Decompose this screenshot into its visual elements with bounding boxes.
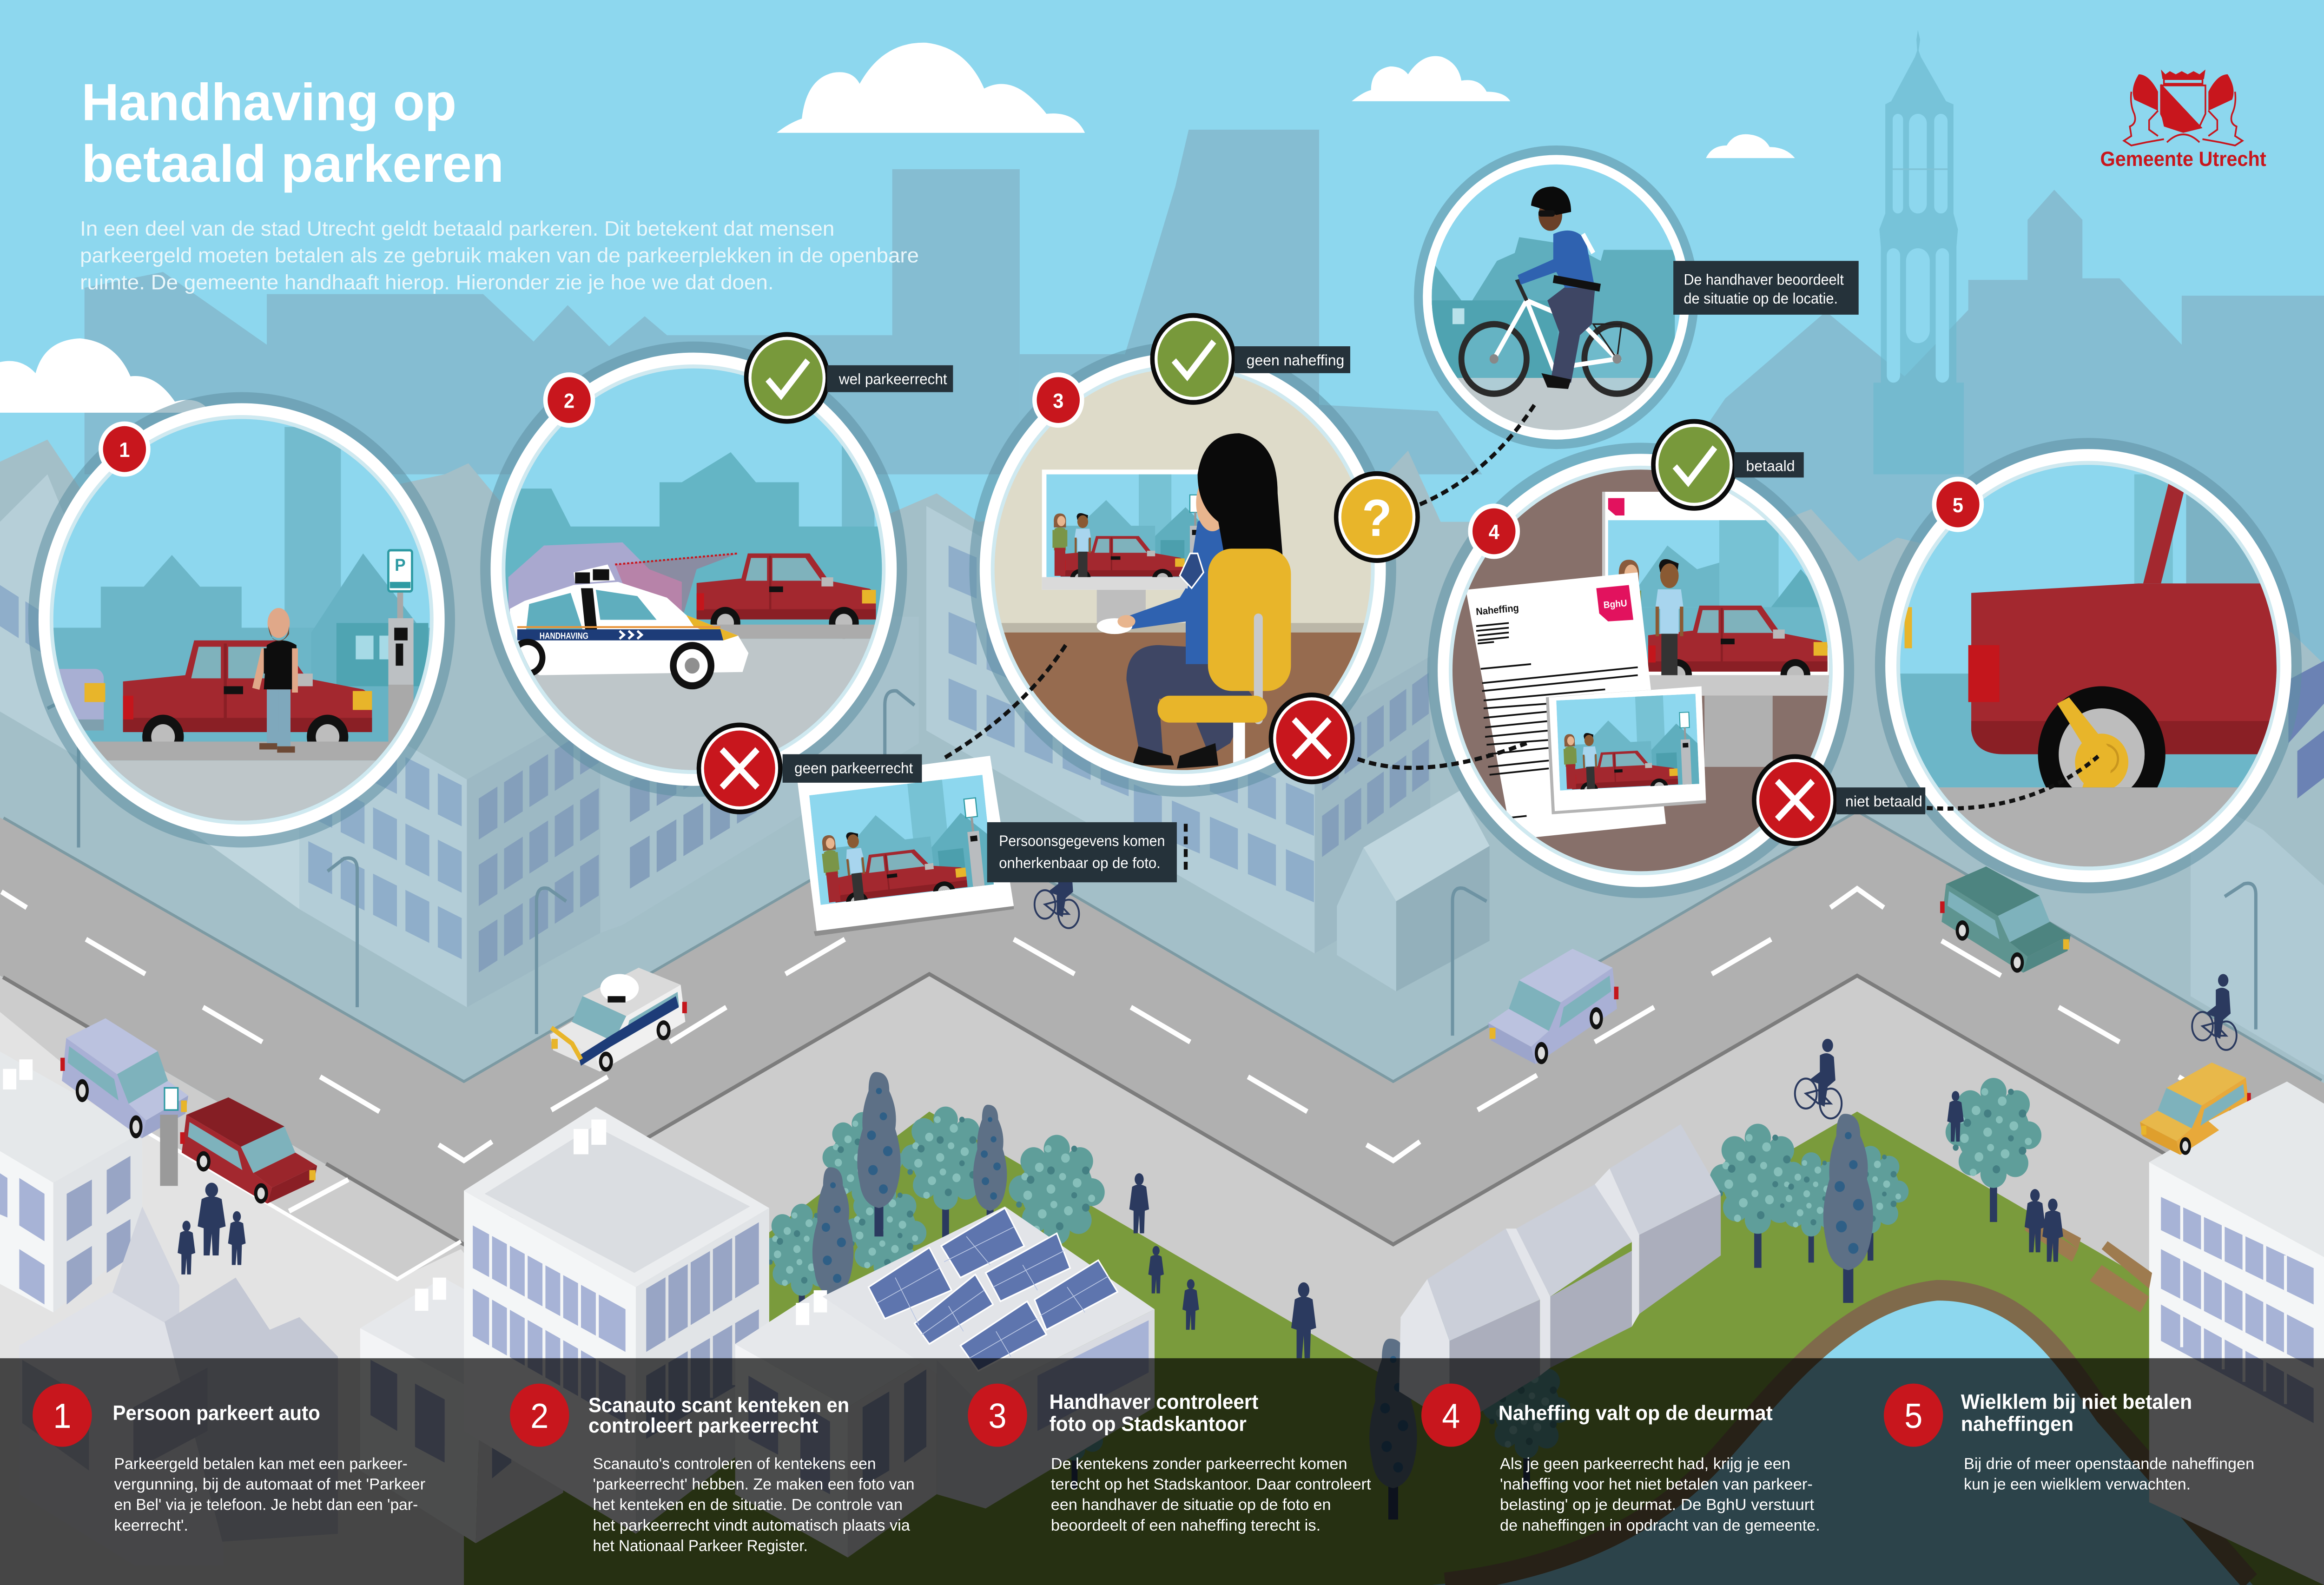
road dashes: [1, 889, 2235, 1211]
scene: back lavender car: [508, 542, 682, 620]
step 2 caption: [510, 1384, 914, 1555]
cross badge: geen parkeerrecht: [697, 723, 783, 814]
car: parked lavender: [60, 1018, 188, 1138]
car: lavender van: [1488, 949, 1618, 1064]
cross badge: niet betaald: [1752, 754, 1838, 846]
scene: ground: [489, 625, 904, 639]
dashed route: desk cross to letter: [1358, 743, 1526, 768]
step 3 body: terecht op het Stadskantoor. Daar controleert: [1051, 1476, 1371, 1493]
logo Gemeente Utrecht: [2100, 70, 2266, 171]
step 2 heading: [588, 1394, 849, 1437]
check badge: wel parkeerrecht: [744, 332, 830, 424]
step 3 body: beoordeelt of een naheffing terecht is.: [1051, 1517, 1320, 1534]
kerb line: [3, 813, 2321, 1083]
step 4 body: Als je geen parkeerrecht had, krijg je een: [1500, 1455, 1790, 1473]
scene: monitor: [1042, 469, 1214, 623]
step 4 body: de naheffingen in opdracht van de gemeente.: [1500, 1517, 1820, 1534]
car: parked red: [180, 1097, 317, 1203]
title text: betaald parkeren: [81, 135, 504, 193]
letter: [1466, 572, 1666, 839]
people and cyclists: [178, 852, 2237, 1358]
letter lines: [1476, 623, 1638, 818]
road surface: [0, 813, 2324, 1246]
upper city block: [0, 440, 2324, 1083]
trees: left park cluster: [762, 1072, 1105, 1324]
scene: parking sign and meter: [388, 550, 414, 748]
step 2 body: 'parkeerrecht' hebben. Ze maken een foto van: [593, 1476, 914, 1493]
building: bottom left corner: [0, 1051, 142, 1312]
letter title: Naheffing: [1476, 602, 1519, 617]
scene: tower: [842, 445, 875, 527]
scene: faint tower and skyline: [2134, 475, 2173, 664]
scene: clamped wheel: [2038, 686, 2166, 822]
green park: [464, 1111, 2324, 1585]
badge 5: 5: [1953, 494, 1963, 517]
scene: open tailgate: [2143, 484, 2185, 583]
canal water: [1432, 1290, 2253, 1585]
intro paragraph: [80, 218, 919, 294]
scene: enforcer: [1097, 433, 1287, 768]
scene: man: [252, 608, 298, 753]
dashed route: desk to photo: [943, 645, 1066, 759]
step 5 body: [1964, 1455, 2254, 1493]
car: scan car: [550, 968, 687, 1071]
step 3 heading: foto op Stadskantoor: [1050, 1413, 1247, 1436]
building: right bottom corner: [2149, 1082, 2324, 1585]
trees under the caption band: [1036, 1313, 2313, 1519]
step 5 number: 5: [1904, 1397, 1922, 1435]
car: yellow: [2140, 1063, 2251, 1155]
scene: skyline: [504, 452, 889, 633]
label: betaald: [1734, 452, 1804, 477]
scene: ground: [1423, 378, 1690, 449]
pavement lower left: [0, 1012, 712, 1585]
trees: right park cluster: [1710, 1078, 2041, 1303]
step 1 body: vergunning, bij de automaat of met 'Parkeer: [114, 1476, 425, 1493]
scene: skyline: [1432, 237, 1675, 379]
building: B: [464, 1107, 769, 1534]
parking sign and meter: [160, 1088, 178, 1186]
title text: Handhaving op: [81, 73, 456, 132]
step 5 heading: [1961, 1391, 2192, 1436]
badge 2: 2: [564, 390, 574, 413]
scene: church tower: [284, 427, 341, 648]
step 4 body: [1500, 1455, 1820, 1534]
check badge: betaald: [1651, 419, 1737, 511]
label: handhaver beoordeelt: de situatie op de locatie.: [1684, 290, 1838, 307]
dashed route: niet betaald to clamp: [1927, 756, 2099, 809]
step 3 heading: Handhaver controleert: [1050, 1391, 1258, 1413]
intro paragraph: In een deel van de stad Utrecht geldt betaald parkeren. Dit betekent dat mensen: [80, 218, 834, 240]
label: geen parkeerrecht: [783, 754, 922, 783]
step 2 heading: Scanauto scant kenteken en: [588, 1394, 849, 1417]
badge 2: [543, 372, 595, 428]
step 5 heading: naheffingen: [1961, 1413, 2073, 1436]
title text: [81, 73, 504, 193]
cloud: left: [0, 338, 211, 413]
house: centre gable: [1337, 791, 1490, 991]
step 5 body: Bij drie of meer openstaande naheffingen: [1964, 1455, 2254, 1473]
step 1 caption: [33, 1384, 425, 1534]
check badge: geen naheffing: [1150, 313, 1236, 405]
label: niet betaald: niet betaald: [1845, 792, 1922, 810]
label: betaald: betaald: [1746, 457, 1795, 475]
scene: ground: [92, 741, 391, 760]
step 5 number: [1884, 1384, 1943, 1447]
scene: red car: [697, 554, 876, 639]
label: niet betaald: [1836, 787, 1925, 814]
label: geen naheffing: [1235, 346, 1350, 373]
solar panels: [869, 1208, 1117, 1371]
building: left block: [178, 601, 919, 1007]
circle 3: enforcer at desk: [969, 342, 1396, 797]
step 2 number: 2: [530, 1397, 548, 1435]
cross badge: desk: [1269, 693, 1355, 784]
scene: enforcer cyclist: [1518, 186, 1601, 389]
label: persoonsgegevens: Persoonsgegevens komen: [999, 832, 1165, 849]
step 1 number: [33, 1384, 92, 1447]
building: centre block: [926, 506, 1430, 953]
step 1 number: 1: [53, 1397, 71, 1435]
scene: floor: [978, 623, 1393, 633]
row of white houses: [1399, 1124, 1721, 1431]
circle: enforcer on bike: [1414, 145, 1698, 449]
question badge: ?: [1362, 489, 1392, 548]
pavement base: [0, 974, 2324, 1585]
circle 2: scan car: [480, 342, 907, 797]
step 2 body: het parkeerrecht vindt automatisch plaats via: [593, 1517, 910, 1534]
step 1 body: Parkeergeld betalen kan met een parkeer-: [114, 1455, 408, 1473]
step 4 body: 'naheffing voor het niet betalen van parkeer-: [1500, 1476, 1813, 1493]
label: persoonsgegevens: onherkenbaar op de foto.: [999, 854, 1161, 872]
badge 4: [1468, 503, 1520, 559]
letter logo: [1596, 585, 1633, 621]
step 1 body: en Bel' via je telefoon. Je hebt dan een 'par-: [114, 1496, 418, 1514]
circle 1: person parks car: [28, 392, 455, 847]
badge 1: [99, 422, 151, 477]
scene: ground: [1882, 787, 2298, 885]
cloud: large top: [777, 43, 1085, 133]
intro paragraph: ruimte. De gemeente handhaaft hierop. Hieronder zie je hoe we dat doen.: [80, 271, 774, 294]
building: right block: [2191, 661, 2324, 1075]
circle 5: wheel clamp: [1875, 438, 2302, 893]
step 1 body: keerrecht'.: [114, 1517, 188, 1534]
scan beam: [615, 554, 738, 620]
scene: parking sign and meter: P: [395, 555, 406, 575]
photo card with anonymised people: [798, 756, 1014, 936]
question badge: [1334, 471, 1420, 563]
step 3 number: 3: [989, 1397, 1007, 1435]
step 2 number: [510, 1384, 569, 1447]
badge 3: 3: [1053, 390, 1063, 413]
step 3 caption: [968, 1384, 1371, 1534]
large photo: [1602, 492, 1829, 691]
step 4 heading: Naheffing valt op de deurmat: [1499, 1402, 1773, 1425]
step 2 body: het Nationaal Parkeer Register.: [593, 1537, 808, 1555]
scene: skyline: [45, 555, 445, 743]
badge 3: [1032, 372, 1084, 428]
circle 4: assessment letter: [1427, 443, 1854, 898]
scene: bicycle: [1461, 278, 1650, 394]
step 5 body: kun je een wielklem verwachten.: [1964, 1476, 2191, 1493]
parking bay markings: [147, 1132, 461, 1279]
step 2 body: [593, 1455, 914, 1555]
building: E: [735, 1290, 937, 1558]
roof over yellow car edge: [2208, 1082, 2324, 1146]
step 2 body: het kenteken en de situatie. De controle van: [593, 1496, 903, 1514]
step 3 number: [968, 1384, 1027, 1447]
badge 5: [1932, 477, 1984, 532]
car: green van: [1940, 866, 2071, 973]
step 4 caption: [1421, 1384, 1820, 1534]
bottom caption band: [0, 1358, 2324, 1585]
step 4 body: belasting' op je deurmat. De BghU verstuurt: [1500, 1496, 1815, 1514]
scene: police scan car: HANDHAVING: [540, 631, 588, 641]
building: C: [360, 1278, 563, 1543]
logo name: Gemeente Utrecht: [2100, 148, 2266, 171]
small photo on letter: [1546, 686, 1706, 814]
step 2 heading: controleert parkeerrecht: [588, 1414, 818, 1437]
step 3 body: [1051, 1455, 1371, 1534]
cloud: right small: [1706, 134, 1795, 158]
step 3 body: een handhaver de situatie op de foto en: [1051, 1496, 1331, 1514]
step 2 body: Scanauto's controleren of kentekens een: [593, 1455, 876, 1473]
cars on the road: [60, 866, 2251, 1203]
step 4 number: [1421, 1384, 1481, 1447]
step 3 heading: [1050, 1391, 1258, 1436]
label: handhaver beoordeelt: [1673, 261, 1859, 315]
label: wel parkeerrecht: [827, 365, 953, 392]
step 3 body: De kentekens zonder parkeerrecht komen: [1051, 1455, 1347, 1473]
road centre edge: [326, 974, 2321, 1244]
step 5 caption: [1884, 1384, 2254, 1493]
step 1 body: [114, 1455, 425, 1534]
cloud: small top: [1352, 56, 1510, 101]
letter logo: BghU: [1603, 598, 1628, 611]
houses: bottom left: [19, 1207, 338, 1565]
label: geen naheffing: geen naheffing: [1247, 351, 1344, 369]
dashed route: photo label side: [1185, 824, 1186, 873]
scene: huge car body: [1968, 583, 2279, 754]
badge 4: 4: [1489, 521, 1499, 544]
building: solar roof: [823, 1207, 1155, 1508]
lamp posts: [47, 691, 2256, 1036]
Dom tower silhouette: [1874, 30, 1964, 475]
scene: police scan car: [510, 564, 748, 689]
label: persoonsgegevens: [987, 822, 1177, 882]
step 5 heading: Wielklem bij niet betalen: [1961, 1391, 2192, 1413]
crest: [2124, 70, 2243, 145]
badge 1: 1: [119, 439, 130, 462]
scene: back car: [59, 669, 105, 731]
label: wel parkeerrecht: wel parkeerrecht: [838, 370, 947, 388]
scene: red car: [123, 641, 372, 742]
intro paragraph: parkeergeld moeten betalen als ze gebruik maken van de parkeerplekken in de openbare: [80, 244, 919, 267]
label: handhaver beoordeelt: De handhaver beoordeelt: [1684, 271, 1844, 288]
scene: chair: [1157, 548, 1291, 770]
dashed route: question mark to bike: [1420, 403, 1536, 504]
desk: [1648, 675, 1829, 696]
step 1 heading: Persoon parkeert auto: [112, 1402, 320, 1425]
label: geen parkeerrecht: geen parkeerrecht: [794, 759, 913, 777]
skyline silhouettes: [85, 130, 2324, 696]
benches: [2025, 1215, 2152, 1312]
step 4 number: 4: [1442, 1397, 1460, 1435]
road lower edge: [3, 977, 148, 1063]
